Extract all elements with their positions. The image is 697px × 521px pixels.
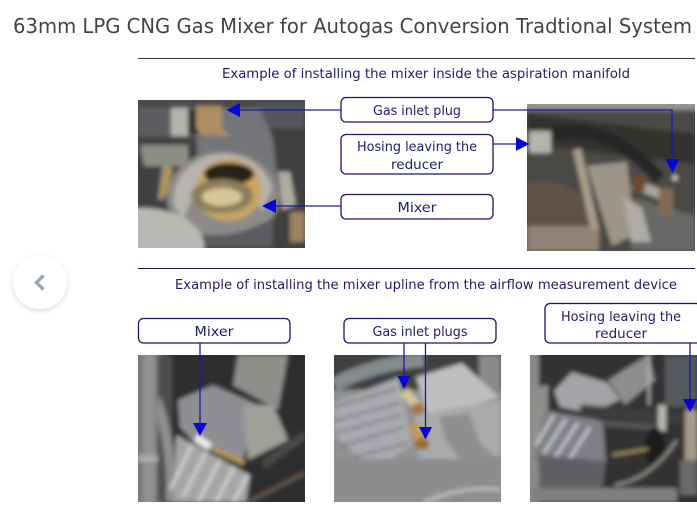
photo: mixer in manifold	[138, 100, 305, 248]
photo: brass gas plugs	[334, 355, 501, 502]
arrow: mixer down	[193, 343, 207, 436]
arrow: gas plug one	[398, 343, 410, 388]
photo: mixer on air box	[138, 355, 305, 502]
previous button	[13, 255, 67, 309]
label: gas inlet plug: Gas inlet plug	[373, 103, 461, 119]
heading: upline installation: Example of installing the mixer upline from the airflow measurement device	[175, 278, 677, 293]
photo: hose on manifold	[527, 104, 695, 251]
label: hosing bottom	[545, 304, 697, 343]
label: mixer	[341, 194, 493, 219]
label: mixer bottom	[138, 318, 290, 343]
arrow: hosing down	[683, 343, 697, 412]
arrow: mixer left	[262, 199, 341, 213]
label: gas inlet plugs: Gas inlet plugs	[372, 324, 468, 340]
label: hosing leaving the reducer: reducer	[391, 157, 443, 173]
arrow: gas plug two	[419, 343, 432, 440]
label: hosing bottom: reducer	[595, 326, 647, 342]
label: hosing bottom: Hosing leaving the	[561, 309, 681, 325]
heading: inside manifold: Example of installing the mixer inside the aspiration manifold	[222, 67, 630, 82]
arrow: gas inlet plug right	[493, 110, 680, 173]
arrow: hosing right	[493, 137, 530, 151]
label: mixer: Mixer	[398, 200, 437, 216]
label: gas inlet plug	[341, 98, 493, 122]
label: hosing leaving the reducer: Hosing leaving the	[357, 139, 477, 155]
label: gas inlet plugs	[344, 318, 496, 343]
label: hosing leaving the reducer	[341, 134, 493, 174]
photo: hose leaving reducer	[530, 355, 697, 502]
label: mixer bottom: Mixer	[194, 324, 234, 340]
arrow: gas inlet plug left	[226, 103, 341, 117]
